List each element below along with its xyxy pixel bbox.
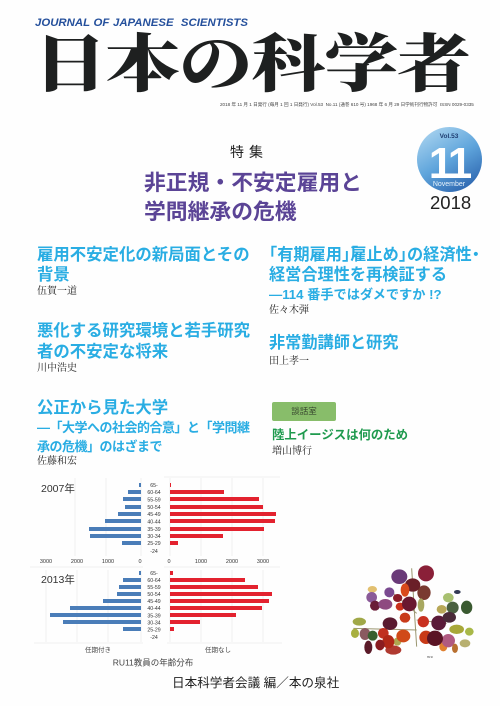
axis labels: 2000	[226, 559, 238, 565]
age labels	[147, 483, 161, 641]
axis labels	[40, 559, 269, 565]
age labels: 35-39	[147, 614, 161, 620]
age labels: 50-54	[147, 505, 161, 511]
discussion room badge	[272, 402, 336, 421]
axis labels: 3000	[40, 559, 52, 565]
article 3 subtitle: —「大学への社会的合意」と「学問継	[37, 420, 250, 435]
age labels: 65-	[150, 571, 158, 577]
age labels: 25-29	[147, 541, 161, 547]
age labels: 25-29	[147, 628, 161, 634]
chart captions: RU11教員の年齢分布	[113, 658, 193, 668]
axis labels: 1000	[102, 559, 114, 565]
year labels	[41, 482, 75, 586]
article 3 subtitle	[37, 420, 250, 454]
discussion article: 陸上イージスは何のため	[272, 428, 408, 442]
author 2: 川中浩史	[37, 363, 77, 374]
age labels: 45-49	[147, 512, 161, 518]
article 3 subtitle: 承の危機」のはざまで	[37, 439, 162, 454]
2013 blue bars	[50, 571, 141, 631]
age labels: 60-64	[147, 578, 161, 584]
age labels: 40-44	[147, 520, 161, 526]
2013 red bars	[170, 571, 272, 631]
age labels: -24	[150, 549, 158, 555]
age labels: 50-54	[147, 592, 161, 598]
article 2: 悪化する研究環境と若手研究	[37, 322, 250, 340]
publication info line: 2018 年 11 月 1 日発行 (毎月 1 回 1 日発行) Vol.53 No.11 (通巻 610 号) 1968 年 6 月 29 日学術刊行物許可 ISSN 0029-0335	[220, 102, 474, 106]
article 4: 経営合理性を再検証する	[269, 266, 447, 284]
article 3: 公正から見た大学	[37, 399, 168, 417]
special feature label: 特集	[230, 144, 268, 160]
article 1: 雇用不安定化の新局面とその	[37, 246, 250, 264]
article 2: 者の不安定な将来	[37, 342, 168, 360]
author 1: 伍賀一道	[37, 286, 77, 297]
author 3: 佐藤和宏	[37, 456, 77, 467]
chart captions: 任期付き	[85, 645, 111, 654]
age labels: 30-34	[147, 620, 161, 626]
feature headline line 1: 非正規・不安定雇用と	[144, 170, 362, 195]
issue badge: Vol.53	[440, 133, 459, 140]
age labels: -24	[150, 635, 158, 641]
issue badge: November	[433, 181, 466, 188]
feature headline line 2: 学問継承の危機	[144, 199, 297, 224]
article 1	[37, 246, 250, 284]
age labels: 35-39	[147, 527, 161, 533]
axis labels: 2000	[71, 559, 83, 565]
chart frames	[30, 477, 282, 643]
axis labels: 3000	[257, 559, 269, 565]
axis labels: 0	[138, 559, 142, 565]
illustration: autumn leaves: m.w	[427, 655, 434, 659]
article 4: 「有期雇用」「雇止め」の経済性・	[261, 246, 484, 264]
age labels: 45-49	[147, 599, 161, 605]
age labels: 55-59	[147, 585, 161, 591]
axis labels: 1000	[195, 559, 207, 565]
age labels: 40-44	[147, 606, 161, 612]
age labels: 30-34	[147, 534, 161, 540]
chart captions: 任期なし	[205, 645, 231, 654]
discussion room badge: 談話室	[291, 406, 317, 416]
article 4	[261, 246, 484, 284]
article 2	[37, 322, 250, 360]
2007 red bars	[170, 483, 276, 545]
issue year: 2018	[430, 192, 471, 213]
article 5: 非常勤講師と研究	[269, 334, 398, 352]
year labels: 2007年	[41, 482, 75, 495]
title: 日本の科学者	[33, 31, 470, 100]
article 1: 背景	[37, 266, 70, 284]
article 4 subtitle: —114 番手ではダメですか !?	[269, 287, 442, 302]
journal english name: JOURNAL OF JAPANESE SCIENTISTS	[35, 17, 248, 29]
author 6: 増山博行	[272, 446, 312, 457]
age labels: 65-	[150, 483, 158, 489]
chart captions	[85, 645, 231, 668]
issue badge: 11	[429, 139, 472, 188]
author 4: 佐々木弾	[269, 305, 309, 316]
age labels: 55-59	[147, 498, 161, 504]
author 5: 田上孝一	[269, 356, 309, 367]
age labels: 60-64	[147, 490, 161, 496]
year labels: 2013年	[41, 573, 75, 586]
2007 blue bars	[89, 483, 141, 545]
axis labels: 0	[167, 559, 171, 565]
publisher line: 日本科学者会議 編／本の泉社	[172, 676, 339, 690]
